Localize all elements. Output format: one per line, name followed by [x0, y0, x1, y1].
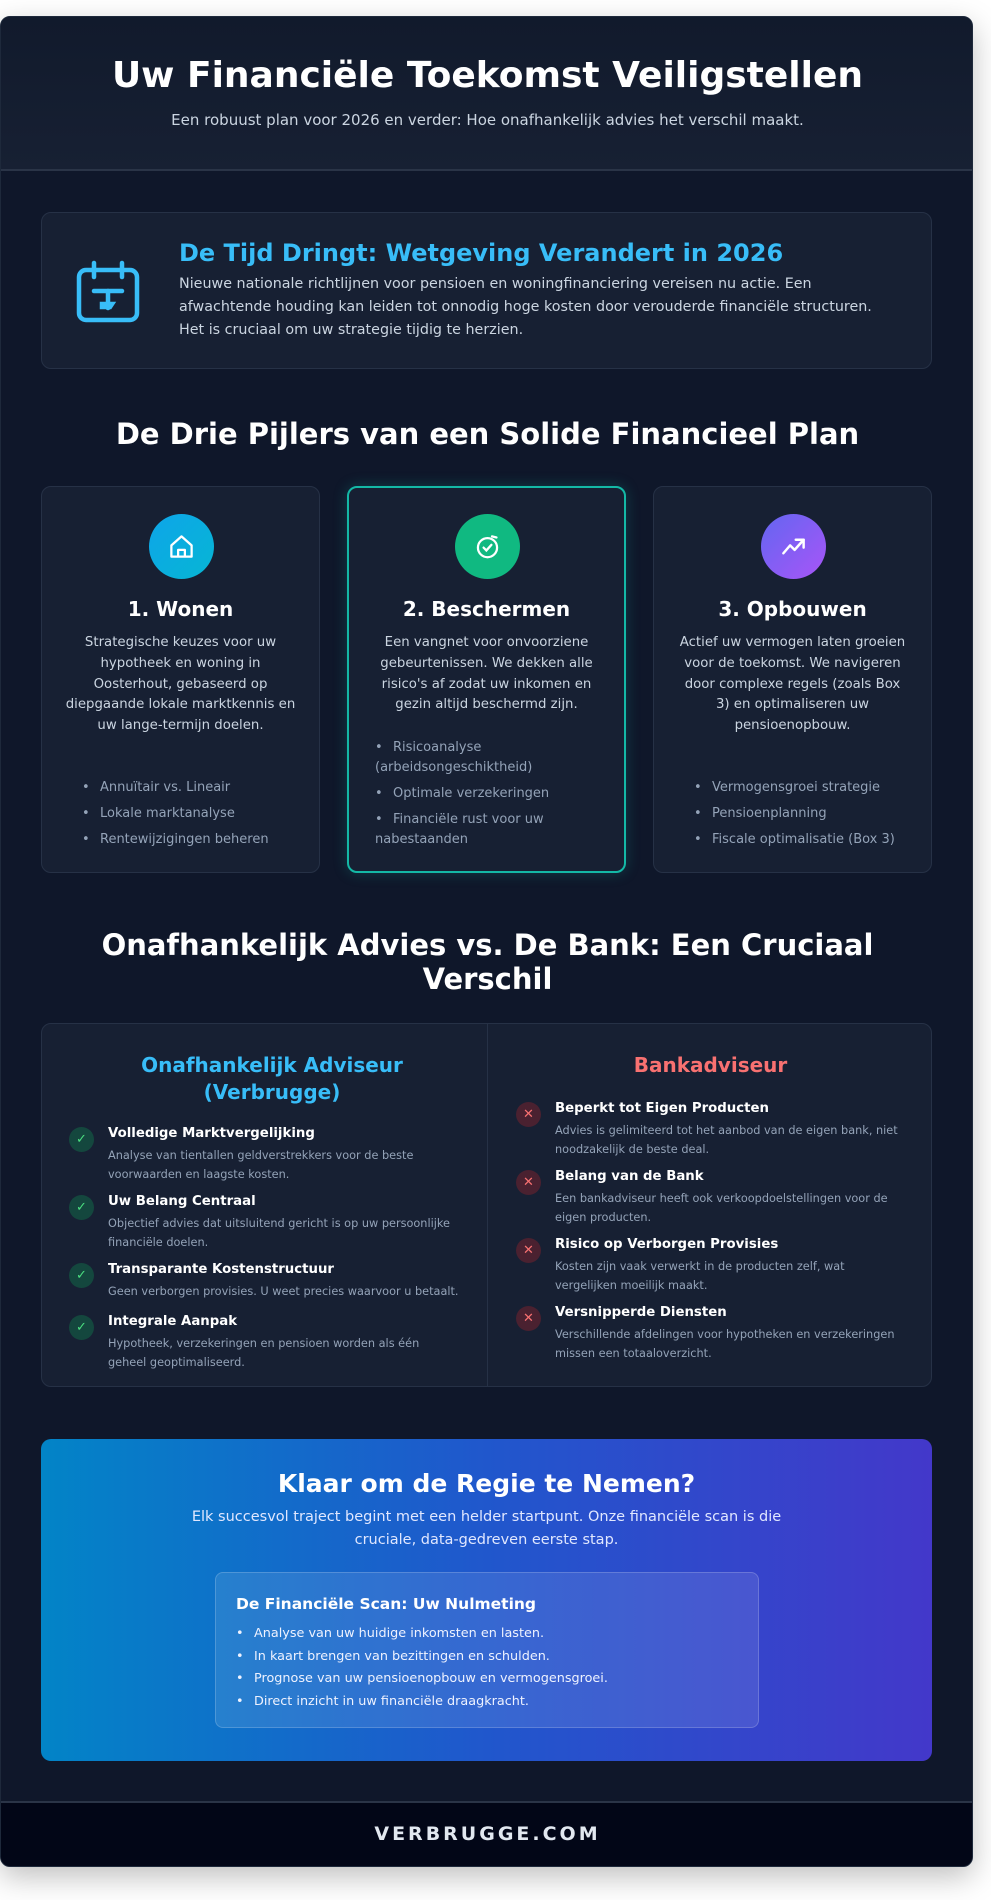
item: marktvergelijking: ✓ [76, 1132, 87, 1147]
item: integrale aanpak: Integrale Aanpak [108, 1314, 237, 1329]
scan box: Prognose van uw pensioenopbouw en vermogensgroei. [254, 1671, 608, 1686]
column heading: onafhankelijk: Onafhankelijk Adviseur (Verbrugge) [141, 1053, 403, 1104]
item: versnipperd: Verschillende afdelingen voor hypotheken en verzekeringen missen een totaaloverzicht. [555, 1328, 894, 1360]
item: belang centraal: ✓ [76, 1200, 87, 1215]
item: eigen producten: Beperkt tot Eigen Producten [555, 1101, 769, 1116]
item: versnipperd [516, 1305, 894, 1360]
item: belang bank: Een bankadviseur heeft ook verkoopdoelstellingen voor de eigen producten. [555, 1192, 888, 1224]
item: provisies: Kosten zijn vaak verwerkt in de producten zelf, wat vergelijken moeilijk maakt. [555, 1260, 845, 1292]
card: beschermen: Risicoanalyse (arbeidsongeschiktheid) [375, 740, 532, 775]
card: beschermen: Optimale verzekeringen [393, 786, 549, 801]
icon: house [149, 514, 214, 579]
card: beschermen: 2. Beschermen [403, 597, 570, 621]
icon: trend up [761, 514, 826, 579]
card: wonen: Annuïtair vs. Lineair [100, 780, 230, 795]
item: marktvergelijking [69, 1126, 413, 1181]
section heading: pijlers: De Drie Pijlers van een Solide Financieel Plan [116, 417, 859, 451]
item: provisies: ✕ [523, 1243, 534, 1258]
item: belang bank: Belang van de Bank [555, 1169, 704, 1184]
item: provisies: Risico op Verborgen Provisies [555, 1237, 778, 1252]
card: wonen: Lokale marktanalyse [100, 806, 235, 821]
item: belang bank: ✕ [523, 1175, 534, 1190]
cta heading: Klaar om de Regie te Nemen? [278, 1469, 695, 1498]
item: kostenstructuur: Geen verborgen provisies. U weet precies waarvoor u betaalt. [108, 1285, 459, 1298]
alert heading: De Tijd Dringt: Wetgeving Verandert in 2026 [179, 239, 783, 267]
alert panel: wetgeving [41, 212, 932, 369]
item: eigen producten: Advies is gelimiteerd tot het aanbod van de eigen bank, niet noodzakelijk de beste deal. [555, 1124, 898, 1156]
subtitle: Een robuust plan voor 2026 en verder: Hoe onafhankelijk advies het verschil maakt. [171, 111, 804, 129]
cta text: Elk succesvol traject begint met een helder startpunt. Onze financiële scan is die cruciale, data-gedreven eerste stap. [192, 1509, 781, 1548]
scan box: Analyse van uw huidige inkomsten en lasten. [254, 1626, 544, 1641]
call to action panel [41, 1439, 932, 1761]
icon: shield check [455, 514, 520, 579]
card: wonen: Strategische keuzes voor uw hypotheek en woning in Oosterhout, gebaseerd op diepgaande lokale marktkennis en uw lange-termijn doelen. [66, 635, 295, 733]
scan box: In kaart brengen van bezittingen en schulden. [254, 1649, 550, 1664]
title: Uw Financiële Toekomst Veiligstellen [112, 55, 863, 96]
item: marktvergelijking: Analyse van tientallen geldverstrekkers voor de beste voorwaarden en laagste kosten. [108, 1149, 413, 1181]
footer: VERBRUGGE.COM [374, 1823, 601, 1845]
header [1, 17, 974, 171]
card: beschermen [347, 486, 626, 873]
item: belang centraal: Objectief advies dat uitsluitend gericht is op uw persoonlijke financiële doelen. [108, 1217, 450, 1249]
item: belang centraal: Uw Belang Centraal [108, 1194, 256, 1209]
scan box [215, 1572, 759, 1728]
item: eigen producten: ✕ [523, 1107, 534, 1122]
item: versnipperd: ✕ [523, 1311, 534, 1326]
section heading: vergelijking: Onafhankelijk Advies vs. De Bank: Een Cruciaal Verschil [102, 928, 873, 996]
item: marktvergelijking: Volledige Marktvergelijking [108, 1126, 315, 1141]
card: opbouwen [653, 486, 932, 873]
item: versnipperd: Versnipperde Diensten [555, 1305, 727, 1320]
alert text: Nieuwe nationale richtlijnen voor pensioen en woningfinanciering vereisen nu actie. Een afwachtende houding kan leiden tot onnodig hoge kosten door verouderde financiële structuren. Het is cruciaal om uw strategie tijdig te herzien. [179, 276, 872, 338]
card: beschermen: Financiële rust voor uw nabestaanden [375, 812, 544, 847]
scan box: Direct inzicht in uw financiële draagkracht. [254, 1694, 529, 1709]
item: kostenstructuur: ✓ [76, 1268, 87, 1283]
item: integrale aanpak: ✓ [76, 1320, 87, 1335]
card: opbouwen: Fiscale optimalisatie (Box 3) [712, 832, 895, 847]
comparison panel [41, 1023, 932, 1387]
card: opbouwen: Pensioenplanning [712, 806, 827, 821]
card: wonen: 1. Wonen [128, 597, 233, 621]
column heading: bank: Bankadviseur [634, 1053, 787, 1077]
item: integrale aanpak: Hypotheek, verzekeringen en pensioen worden als één geheel geoptimaliseerd. [108, 1337, 419, 1369]
footer [1, 1801, 974, 1868]
item: belang centraal [69, 1194, 450, 1249]
item: kostenstructuur: Transparante Kostenstructuur [108, 1262, 334, 1277]
card: beschermen: Een vangnet voor onvoorziene gebeurtenissen. We dekken alle risico's af zodat uw inkomen en gezin altijd beschermd zijn. [380, 635, 593, 712]
item: integrale aanpak [69, 1314, 419, 1369]
card: opbouwen: 3. Opbouwen [718, 597, 867, 621]
item: kostenstructuur [69, 1262, 459, 1298]
card: opbouwen: Actief uw vermogen laten groeien voor de toekomst. We navigeren door complexe regels (zoals Box 3) en optimaliseren uw pensioenopbouw. [680, 635, 905, 733]
item: eigen producten [516, 1101, 898, 1156]
scan box: De Financiële Scan: Uw Nulmeting [236, 1595, 536, 1613]
card: wonen [41, 486, 320, 873]
icon: calendar [76, 260, 140, 322]
item: belang bank [516, 1169, 888, 1224]
card: opbouwen: Vermogensgroei strategie [712, 780, 880, 795]
item: provisies [516, 1237, 845, 1292]
card: wonen: Rentewijzigingen beheren [100, 832, 269, 847]
